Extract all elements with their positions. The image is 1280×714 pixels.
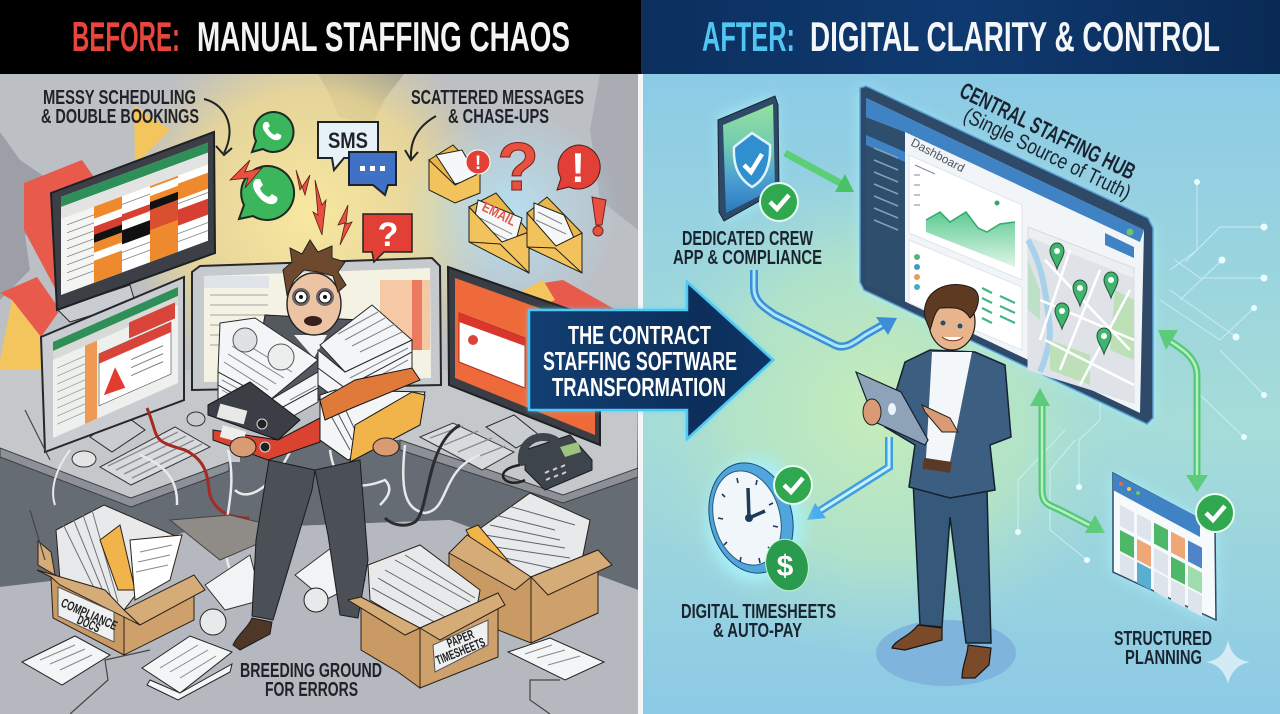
icon: calendar — [1113, 473, 1216, 620]
legs — [252, 460, 315, 620]
panel: after scene — [643, 74, 1280, 714]
icon: red exclamation bubble — [557, 144, 600, 191]
heading: central staffing hub: (Single Source of Truth) — [960, 104, 1134, 205]
arrow: transformation banner: STAFFING SOFTWARE — [543, 346, 737, 376]
icon: clock check badge — [774, 466, 812, 504]
circuit lines — [1018, 182, 1264, 560]
map card — [1028, 227, 1134, 403]
arrow: crew app to hub — [754, 270, 897, 347]
box: compliance docs — [37, 505, 205, 655]
label: crew app — [673, 228, 822, 269]
icon: red question bubble: ? — [378, 216, 398, 254]
heading: central staffing hub — [956, 77, 1140, 205]
arrow: transformation banner: TRANSFORMATION — [552, 372, 726, 402]
label: scattered messages: & CHASE-UPS — [448, 106, 549, 128]
label: structured planning — [1114, 628, 1212, 669]
box: back carton with papers — [449, 493, 612, 643]
label: digital timesheets: & AUTO-PAY — [713, 620, 802, 642]
icon: exclamation mark — [592, 197, 606, 236]
dashboard heading: Dashboard — [909, 135, 967, 175]
icon: envelope with alert: ! — [475, 153, 481, 174]
label: messy scheduling: MESSY SCHEDULING — [43, 87, 196, 109]
stressed worker — [170, 240, 425, 650]
label: structured planning: STRUCTURED — [1114, 628, 1212, 650]
label: digital timesheets: DIGITAL TIMESHEETS — [681, 601, 836, 623]
arrow: hub to planning right — [1158, 330, 1208, 492]
crack lines — [25, 410, 560, 714]
header: before: MANUAL STAFFING CHAOS — [197, 13, 570, 60]
arrow: scattered messages pointer — [405, 116, 436, 160]
keyboards and mice — [72, 412, 514, 485]
scattered papers — [22, 588, 604, 700]
arrow: transformation banner — [529, 282, 773, 439]
icon: clock — [697, 453, 805, 583]
box: paper timesheets — [348, 545, 505, 688]
icon: email envelope: EMAIL — [480, 198, 519, 229]
icon: red question bubble — [363, 214, 412, 262]
header: before — [0, 0, 641, 74]
head — [283, 240, 346, 335]
icon: whatsapp large — [239, 166, 294, 220]
left paper stack — [218, 318, 318, 416]
header: before: BEFORE: — [72, 13, 180, 60]
tablet — [856, 372, 928, 445]
shirt — [926, 352, 972, 462]
arrow: hub to planning left — [1030, 388, 1105, 533]
desk — [0, 370, 638, 590]
icon: sms bubble — [318, 122, 378, 170]
label: breeding ground — [240, 660, 382, 701]
icon: email envelope — [469, 193, 529, 273]
icon: lightning bolts — [230, 160, 352, 245]
header: after — [641, 0, 1280, 74]
box: paper timesheets: TIMESHEETS — [434, 634, 488, 668]
icon: big red question mark: ? — [497, 129, 539, 205]
arrow: transformation banner: THE CONTRACT — [568, 320, 711, 350]
right paper stack — [318, 304, 413, 392]
label: breeding ground: FOR ERRORS — [265, 679, 358, 701]
box: compliance docs: DOCS — [75, 612, 103, 636]
icon: envelope with alert — [429, 145, 490, 203]
label: crew app: APP & COMPLIANCE — [673, 247, 822, 269]
label: structured planning: PLANNING — [1125, 647, 1202, 669]
desk phone — [503, 435, 592, 490]
monitor: red alert screen — [448, 267, 600, 448]
arrow: phone to hub — [785, 153, 854, 192]
icon: red exclamation bubble: ! — [571, 144, 585, 191]
arrow: messy scheduling pointer — [204, 99, 232, 155]
header: after: AFTER: — [702, 13, 795, 60]
shoes — [892, 625, 942, 650]
monitor: central spreadsheet — [192, 258, 441, 390]
belt — [922, 458, 952, 473]
head — [924, 285, 978, 350]
icon: phone with shield — [718, 96, 779, 221]
hands — [230, 437, 256, 457]
label: scattered messages: SCATTERED MESSAGES — [411, 87, 584, 109]
icon: dollar coin — [760, 534, 814, 596]
torn floor papers behind legs — [169, 514, 258, 561]
arrow: hub to timesheets — [807, 437, 889, 520]
monitor: messy schedule spreadsheet — [51, 132, 215, 322]
heading: central staffing hub: CENTRAL STAFFING HUB — [956, 77, 1140, 185]
binders — [208, 382, 300, 440]
torso — [263, 314, 353, 400]
panel: before scene — [0, 74, 640, 714]
monitor: warning alert — [41, 277, 184, 452]
shoe — [233, 618, 272, 650]
activity list card — [909, 240, 1022, 350]
cables — [52, 407, 480, 569]
icon: dollar coin: $ — [777, 550, 794, 583]
icon: second envelope — [527, 197, 582, 273]
label: digital timesheets — [681, 601, 836, 642]
icon: sms bubble: SMS — [328, 128, 368, 153]
divider — [638, 74, 643, 714]
icon: phone check badge — [760, 183, 798, 221]
label: crew app: DEDICATED CREW — [682, 228, 813, 250]
chart card — [909, 155, 1022, 280]
icon: blue chat bubble — [349, 152, 396, 195]
icon: sparkle — [1206, 640, 1250, 684]
central dashboard screen — [860, 86, 1153, 424]
label: messy scheduling: & DOUBLE BOOKINGS — [41, 106, 199, 128]
folder — [320, 390, 425, 460]
label: messy scheduling — [42, 90, 198, 123]
box: paper timesheets: PAPER — [445, 626, 476, 651]
icon: calendar check badge — [1196, 494, 1234, 532]
businessman — [856, 285, 1016, 686]
trousers — [913, 480, 991, 643]
label: breeding ground: BREEDING GROUND — [240, 660, 382, 682]
jacket — [885, 350, 1011, 498]
box: compliance docs: COMPLIANCE — [59, 595, 120, 633]
icon: whatsapp small — [252, 112, 294, 152]
label: scattered messages — [412, 90, 584, 123]
hands — [863, 399, 881, 425]
